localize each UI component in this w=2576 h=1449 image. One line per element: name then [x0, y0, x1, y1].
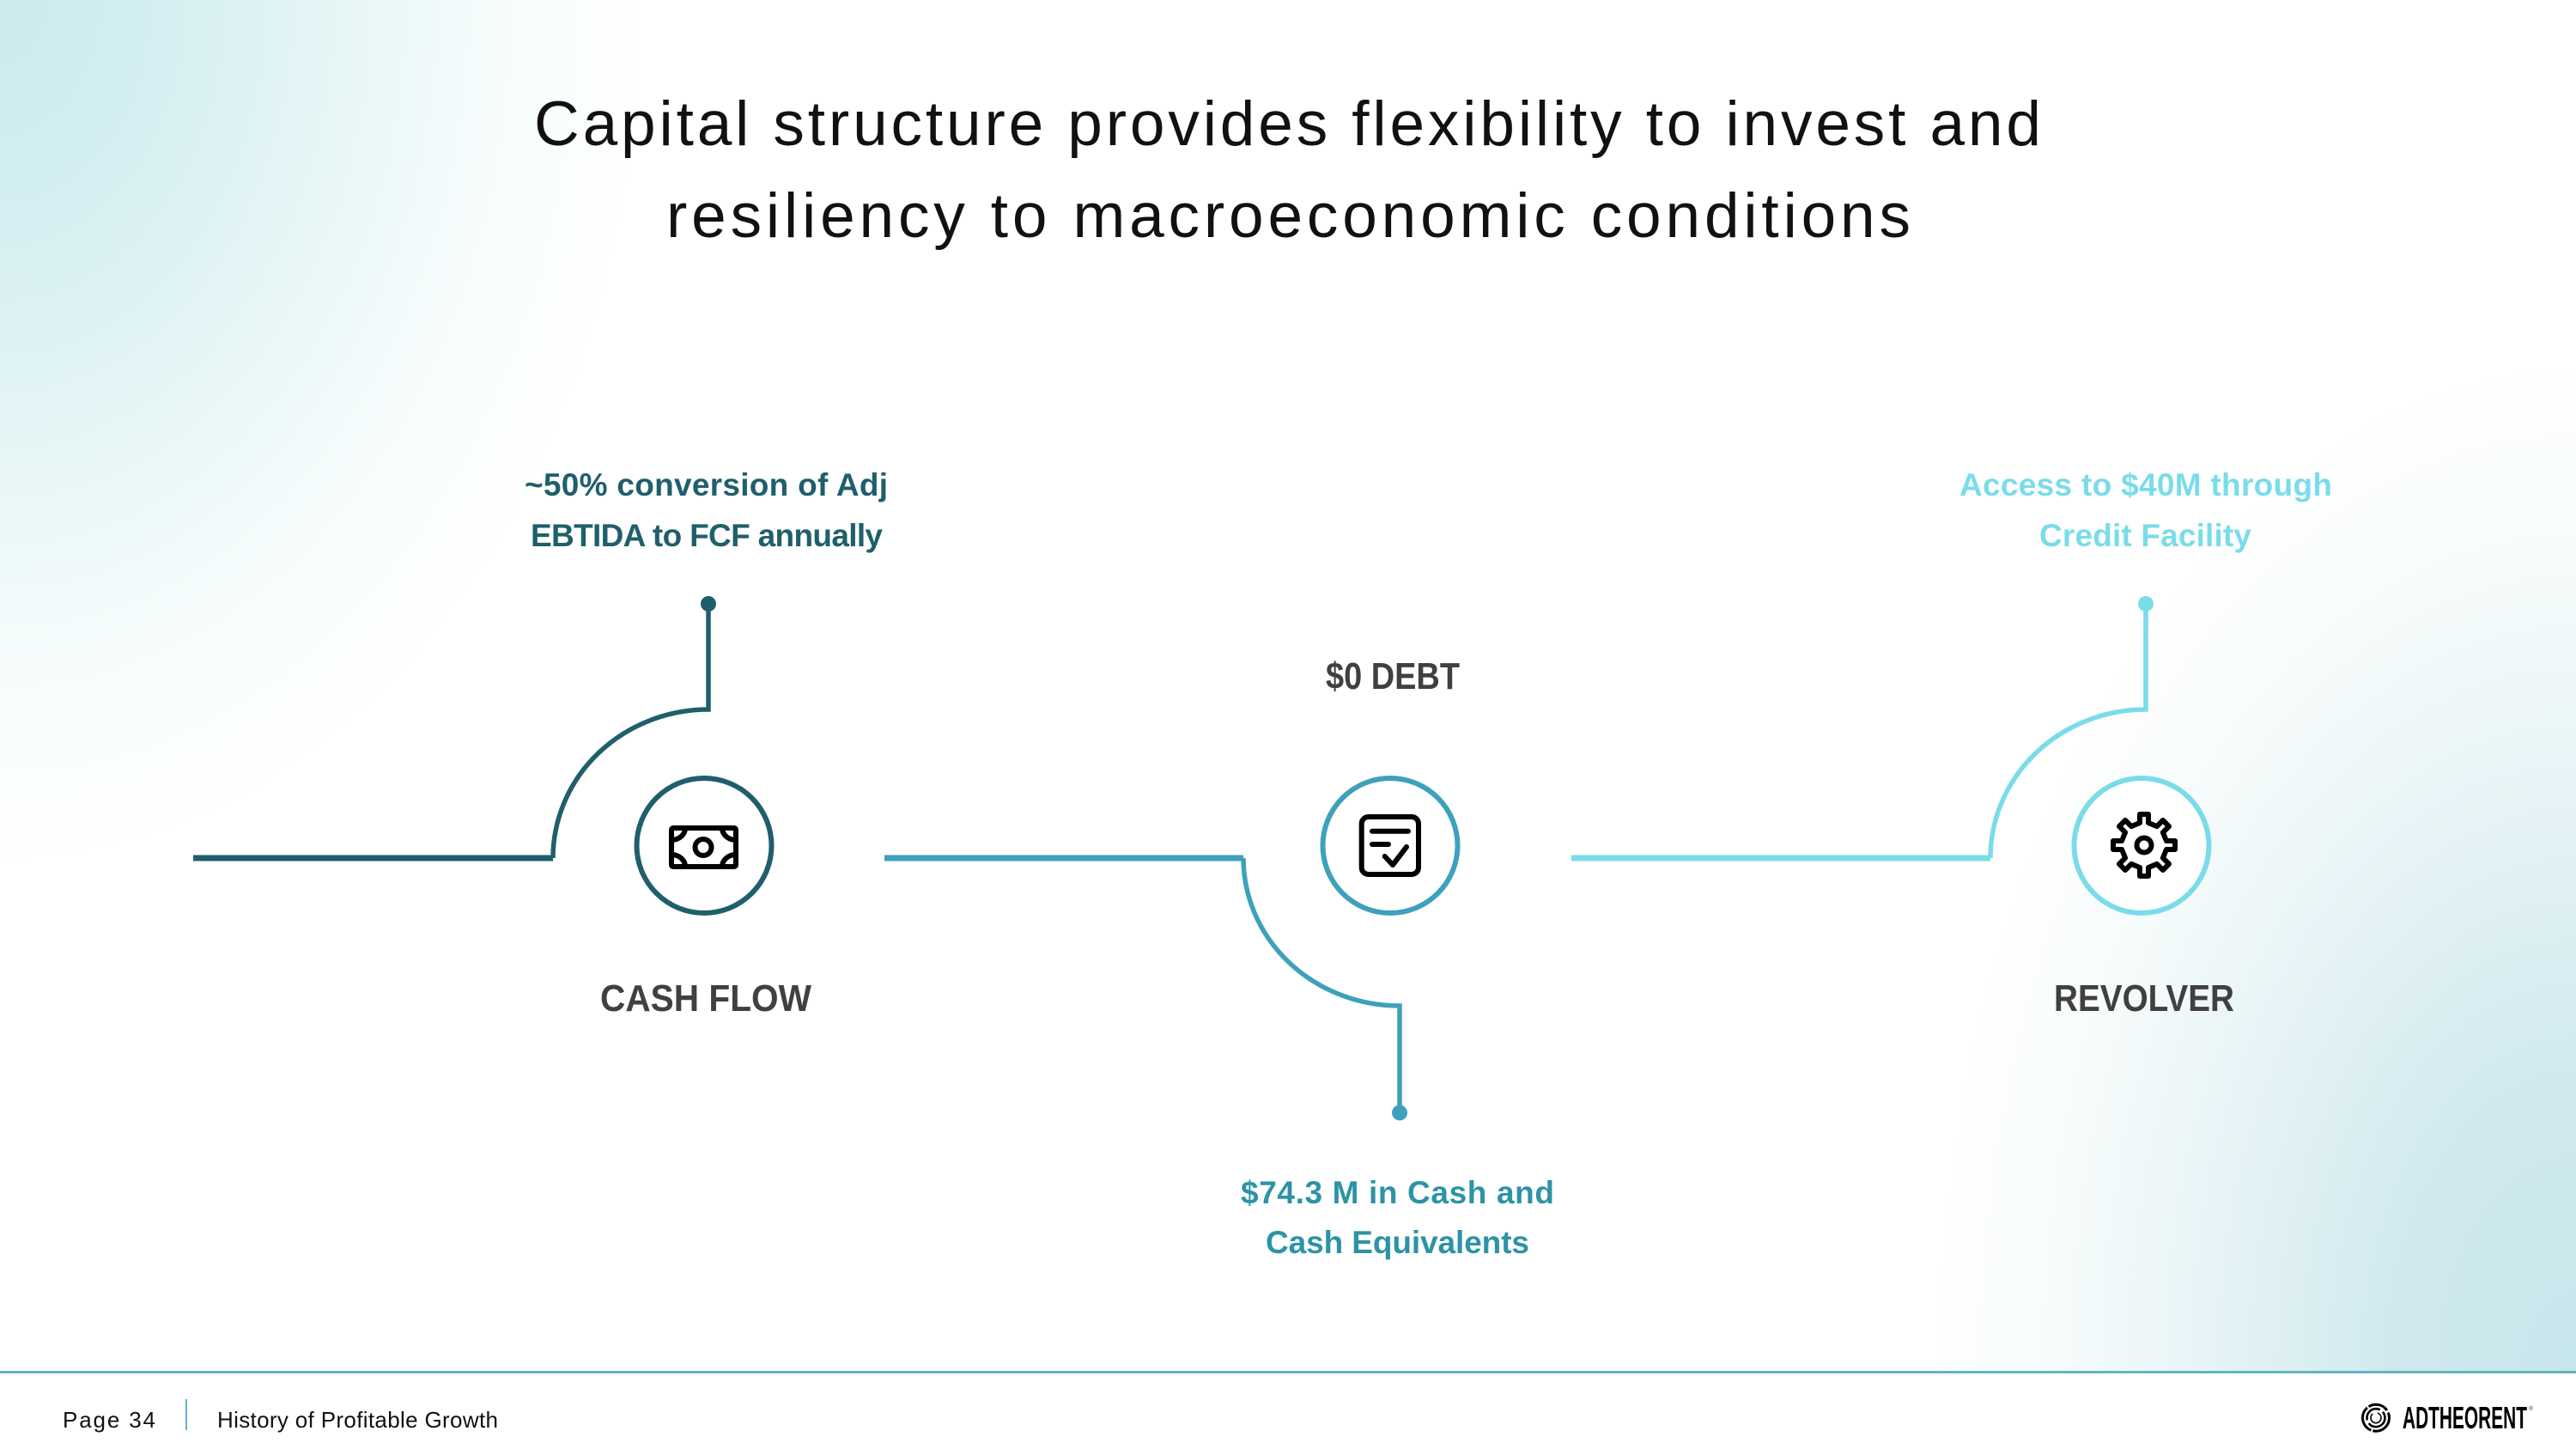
callout: credit facility: Credit Facility	[2039, 518, 2251, 553]
callout: credit facility: Access to $40M through	[1959, 467, 2332, 502]
title: resiliency to macroeconomic conditions	[666, 181, 1911, 251]
callout: cash and equivalents: $74.3 M in Cash and	[1241, 1175, 1554, 1210]
callout: cash flow conversion: ~50% conversion of Adj	[525, 467, 888, 502]
panel: revolver	[1571, 467, 2332, 1020]
connector: cash flow	[193, 596, 716, 858]
logo: AdTheorent	[2363, 1400, 2534, 1435]
page number: Page 34	[63, 1407, 155, 1433]
title	[534, 89, 2041, 251]
callout: credit facility	[1959, 467, 2332, 553]
icon: banknote	[637, 778, 771, 913]
callout: cash flow conversion: EBTIDA to FCF annually	[531, 518, 883, 553]
label: zero debt: $0 DEBT	[1326, 655, 1460, 697]
logo: AdTheorent: ®	[2529, 1405, 2534, 1412]
label: revolver: REVOLVER	[2054, 977, 2234, 1020]
title: Capital structure provides flexibility to invest and	[534, 89, 2041, 159]
connector: cash and equivalents	[884, 858, 1407, 1120]
connector: revolver	[1571, 596, 2154, 858]
callout: cash and equivalents	[1241, 1175, 1554, 1260]
section name: History of Profitable Growth	[217, 1407, 498, 1433]
panel: debt	[884, 655, 1554, 1260]
panel: cash flow	[193, 467, 888, 1020]
icon: gear	[2075, 778, 2208, 913]
label: cash flow: CASH FLOW	[600, 977, 811, 1020]
callout: cash and equivalents: Cash Equivalents	[1266, 1225, 1529, 1260]
footer	[0, 1371, 2576, 1435]
callout: cash flow conversion	[525, 467, 888, 553]
icon: checklist document	[1322, 778, 1458, 913]
